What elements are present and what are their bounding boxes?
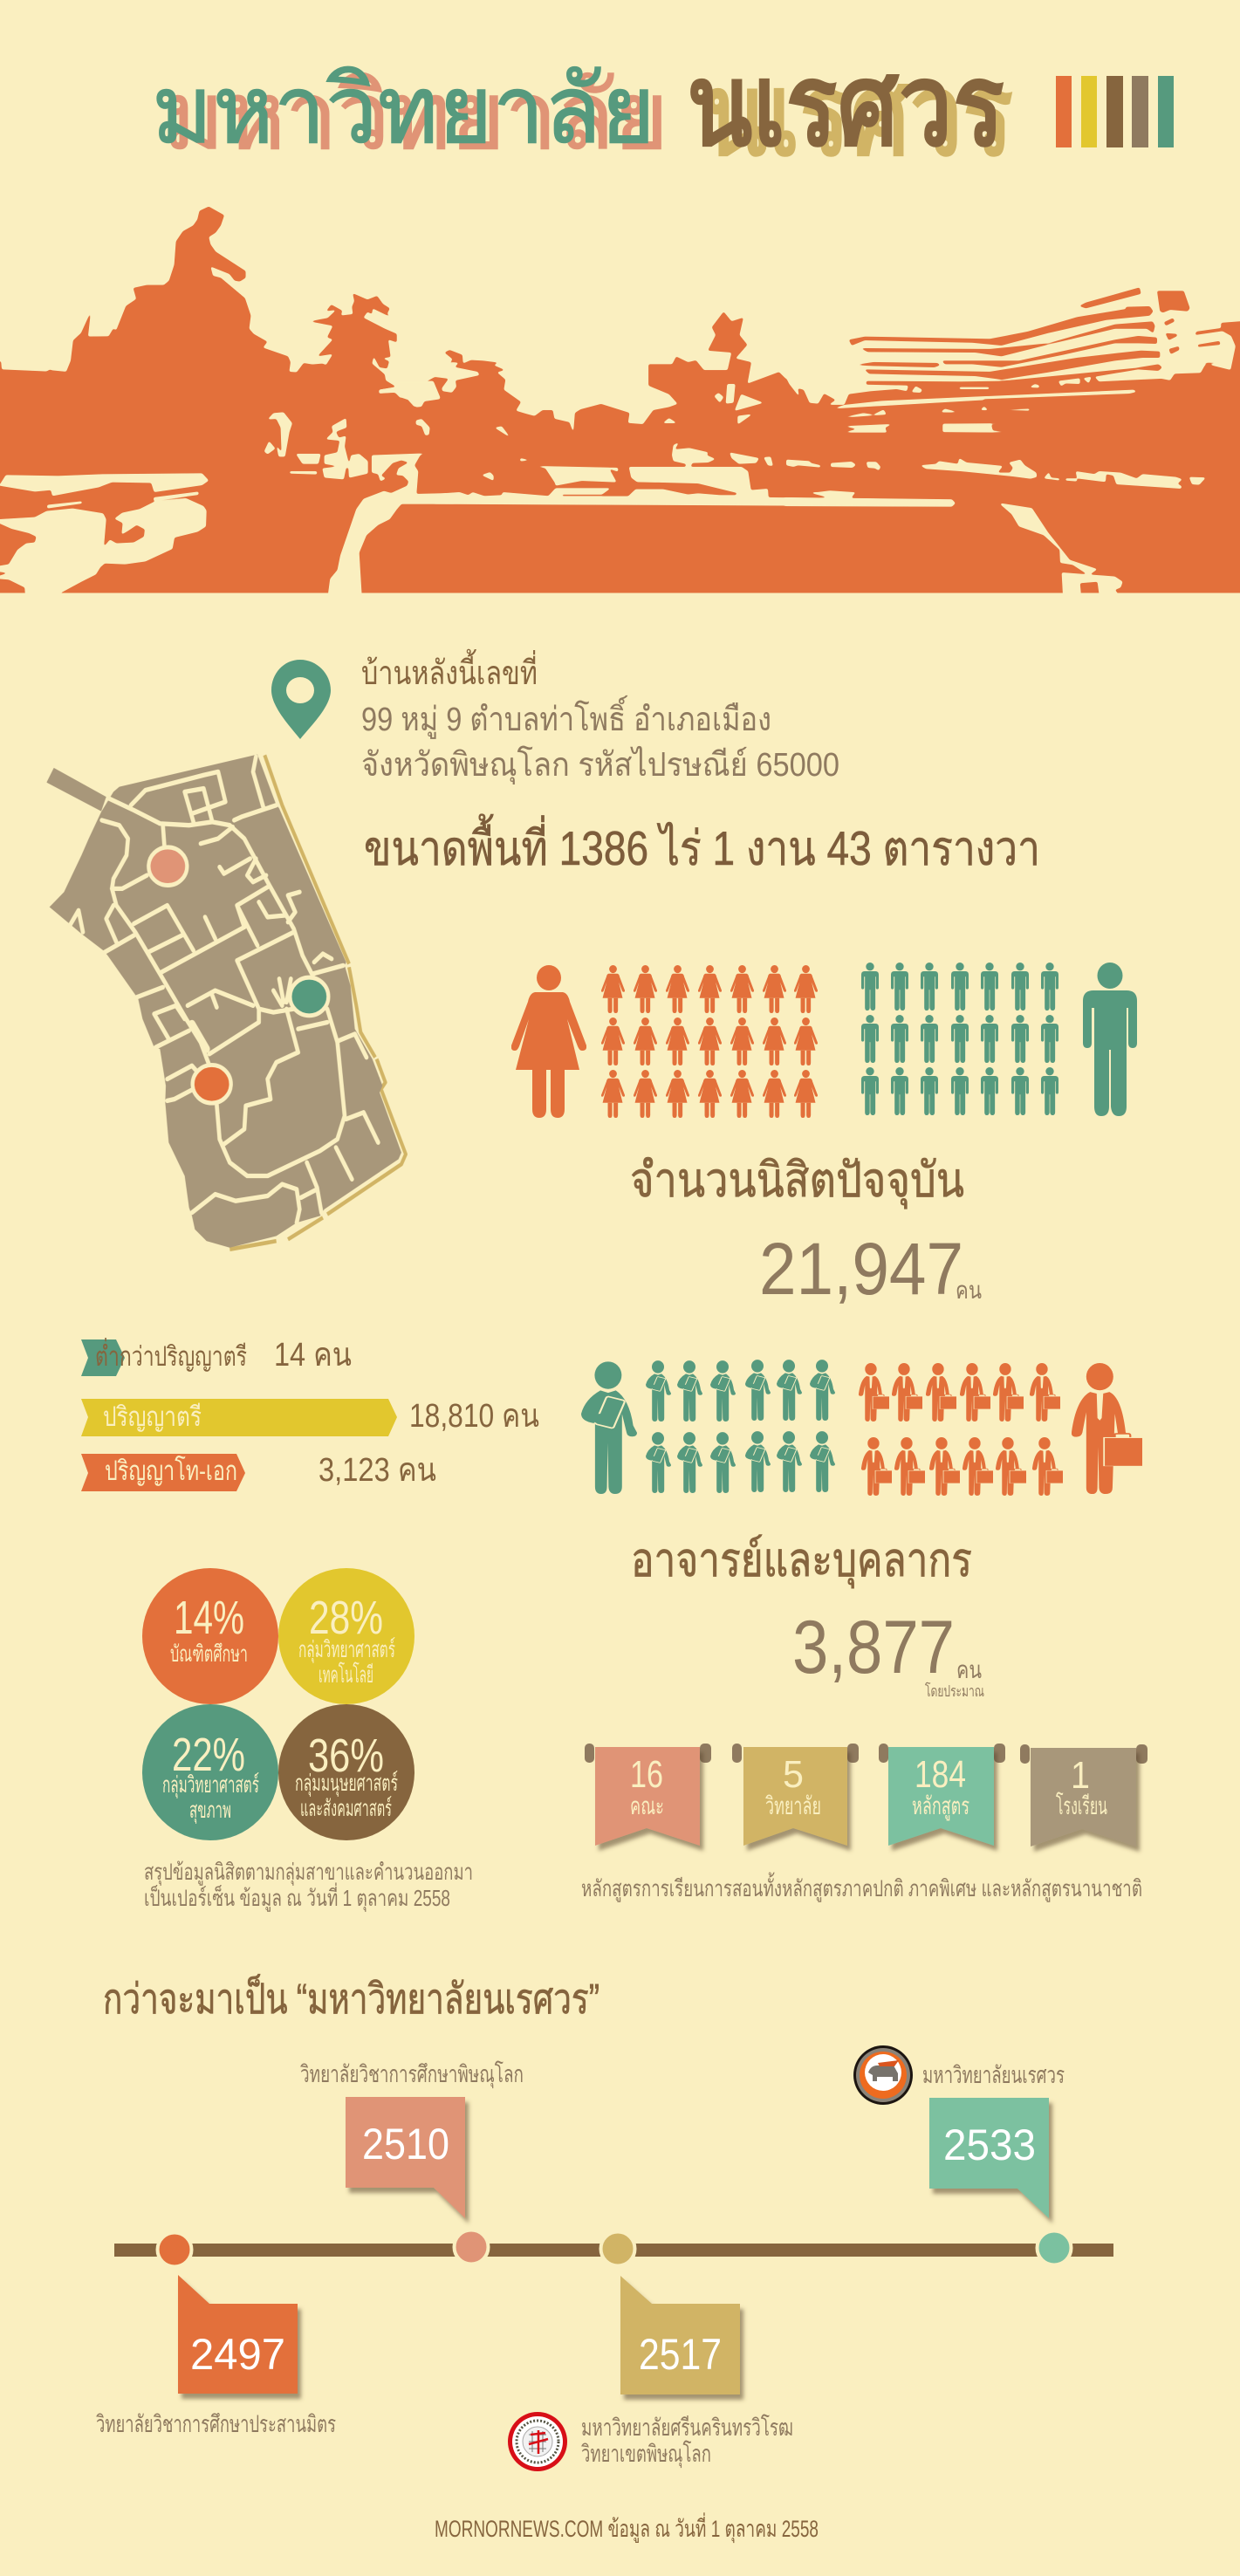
circle: 36%: 36% xyxy=(308,1730,384,1782)
caption: percent summary: เป็นเปอร์เซ็น ข้อมูล ณ วันที่ 1 ตุลาคม 2558 xyxy=(144,1882,450,1912)
number: students: คน xyxy=(956,1277,982,1304)
icon group: staff xyxy=(859,1363,1142,1496)
heading: current students: จำนวนนิสิตปัจจุบัน xyxy=(630,1153,964,1209)
flag: 1 school xyxy=(1020,1744,1148,1846)
timeline dot: 2497 xyxy=(157,2232,192,2267)
map roads xyxy=(70,757,378,1223)
callout: 2510: 2510 xyxy=(362,2120,449,2168)
flag: 5 colleges xyxy=(732,1744,859,1846)
title text: มหาวิทยาลัย: มหาวิทยาลัย xyxy=(152,57,655,162)
callout: 2510 xyxy=(346,2097,465,2218)
flag: 5 colleges: 5 xyxy=(783,1753,804,1796)
circle: 36%: และสังคมศาสตร์ xyxy=(300,1795,392,1821)
circle: 28% xyxy=(278,1568,414,1704)
heading: faculty and staff: อาจารย์และบุคลากร xyxy=(631,1534,972,1589)
circle: 22%: 22% xyxy=(172,1729,245,1781)
flag: 1 school: 1 xyxy=(1071,1754,1090,1797)
ribbon: below bachelor xyxy=(81,1337,352,1376)
flag: 16 faculties: คณะ xyxy=(630,1792,664,1819)
icon group: male students xyxy=(861,963,1137,1116)
flag: 16 faculties: 16 xyxy=(630,1753,663,1796)
label: 2510: วิทยาลัยวิชาการศึกษาพิษณุโลก xyxy=(300,2061,524,2089)
footer credit: MORNORNEWS.COM ข้อมูล ณ วันที่ 1 ตุลาคม 2558 xyxy=(435,2512,819,2544)
circle: 36% xyxy=(278,1704,414,1840)
ribbon: bachelor: ปริญญาตรี xyxy=(103,1401,202,1432)
callout: 2497: 2497 xyxy=(190,2330,285,2379)
banner: hospital building xyxy=(786,287,1240,599)
callout: 2517: 2517 xyxy=(639,2330,722,2379)
timeline dot: 2517 xyxy=(600,2232,635,2265)
title text: มหาวิทยาลัย shadow: มหาวิทยาลัย xyxy=(163,63,668,168)
caption: percent summary xyxy=(144,1859,473,1912)
ribbon: bachelor: 18,810 คน xyxy=(409,1398,539,1435)
circle: 14%: 14% xyxy=(174,1592,244,1644)
banner: campus silhouette xyxy=(0,207,1240,627)
ribbon: below bachelor: ต่ำกว่าปริญญาตรี xyxy=(95,1338,247,1372)
campus map xyxy=(46,755,406,1250)
timeline dot: 2533 xyxy=(1037,2230,1072,2265)
flag: 5 colleges: วิทยาลัย xyxy=(765,1792,821,1819)
circle: 28%: กลุ่มวิทยาศาสตร์ xyxy=(298,1636,395,1663)
map marker: salmon xyxy=(148,847,187,886)
title text: นเรศวร: นเรศวร xyxy=(687,41,1004,169)
label: 2497: วิทยาลัยวิชาการศึกษาประสานมิตร xyxy=(96,2411,336,2437)
circle: 14% xyxy=(142,1568,278,1704)
address text: จังหวัดพิษณุโลก รหัสไปรษณีย์ 65000 xyxy=(361,745,839,784)
number: staff: 3,877 xyxy=(792,1606,955,1689)
map marker: teal xyxy=(290,977,328,1016)
circle: 28%: 28% xyxy=(309,1592,383,1644)
callout: 2497 xyxy=(178,2275,298,2394)
label: 2533: มหาวิทยาลัยนเรศวร xyxy=(922,2062,1065,2088)
title text: นเรศวร shadow: นเรศวร xyxy=(703,51,1013,179)
callout: 2533: 2533 xyxy=(943,2120,1036,2169)
logo: Srinakharinwirot University xyxy=(508,2412,567,2471)
callout: 2533 xyxy=(929,2098,1049,2218)
map marker: orange xyxy=(193,1065,231,1103)
number: students: 21,947 xyxy=(759,1228,963,1310)
label: 2517: วิทยาเขตพิษณุโลก xyxy=(581,2441,711,2469)
circle: 22%: สุขภาพ xyxy=(189,1797,231,1824)
banner: orange silhouette xyxy=(0,207,1240,622)
icon group: female students xyxy=(511,965,818,1118)
ribbon: master and doctorate: ปริญญาโท-เอก xyxy=(105,1456,237,1486)
flag: 16 faculties xyxy=(585,1744,711,1846)
icon group: teachers xyxy=(581,1360,835,1494)
address text: บ้านหลังนี้เลขที่ xyxy=(361,648,538,692)
timeline dot: 2510 xyxy=(454,2230,489,2264)
icon: location pin xyxy=(271,660,331,739)
flag: 1 school: โรงเรียน xyxy=(1056,1792,1107,1819)
colour stripes xyxy=(1056,76,1174,147)
address text: 99 หมู่ 9 ตำบลท่าโพธิ์ อำเภอเมือง xyxy=(361,695,771,739)
circle: 14%: บัณฑิตศึกษา xyxy=(170,1641,248,1667)
label: 2517 xyxy=(581,2415,793,2469)
ribbon: master and doctorate: 3,123 คน xyxy=(319,1452,436,1489)
banner: cream highlights xyxy=(0,377,1206,600)
flag: 184 programs xyxy=(879,1744,1005,1846)
number: staff: คน xyxy=(956,1656,982,1683)
timeline bar xyxy=(114,2230,1113,2267)
caption: percent summary: สรุปข้อมูลนิสิตตามกลุ่มสาขาและคำนวนออกมา xyxy=(144,1859,473,1886)
title xyxy=(152,41,1013,179)
ribbon: master and doctorate xyxy=(81,1452,436,1491)
heading: timeline: กว่าจะมาเป็น “มหาวิทยาลัยนเรศวร” xyxy=(103,1974,599,2023)
label: 2517: มหาวิทยาลัยศรีนครินทรวิโรฒ xyxy=(581,2415,793,2441)
callout: 2517 xyxy=(620,2276,740,2394)
banner bottom edge xyxy=(0,593,1240,628)
ribbon: below bachelor: 14 คน xyxy=(274,1337,352,1374)
flag: 184 programs: 184 xyxy=(915,1753,966,1796)
ribbon: bachelor xyxy=(81,1398,539,1436)
circle: 36%: กลุ่มมนุษยศาสตร์ xyxy=(295,1770,398,1797)
flag: 184 programs: หลักสูตร xyxy=(912,1792,969,1821)
number: staff: โดยประมาณ xyxy=(925,1682,984,1700)
circle: 28%: เทคโนโลยี xyxy=(319,1661,373,1688)
circle: 22% xyxy=(142,1704,278,1840)
address text xyxy=(361,648,839,784)
area text: ขนาดพื้นที่ 1386 ไร่ 1 งาน 43 ตารางวา xyxy=(364,814,1040,875)
circle: 22%: กลุ่มวิทยาศาสตร์ xyxy=(162,1771,259,1798)
logo: Naresuan University xyxy=(853,2045,913,2105)
